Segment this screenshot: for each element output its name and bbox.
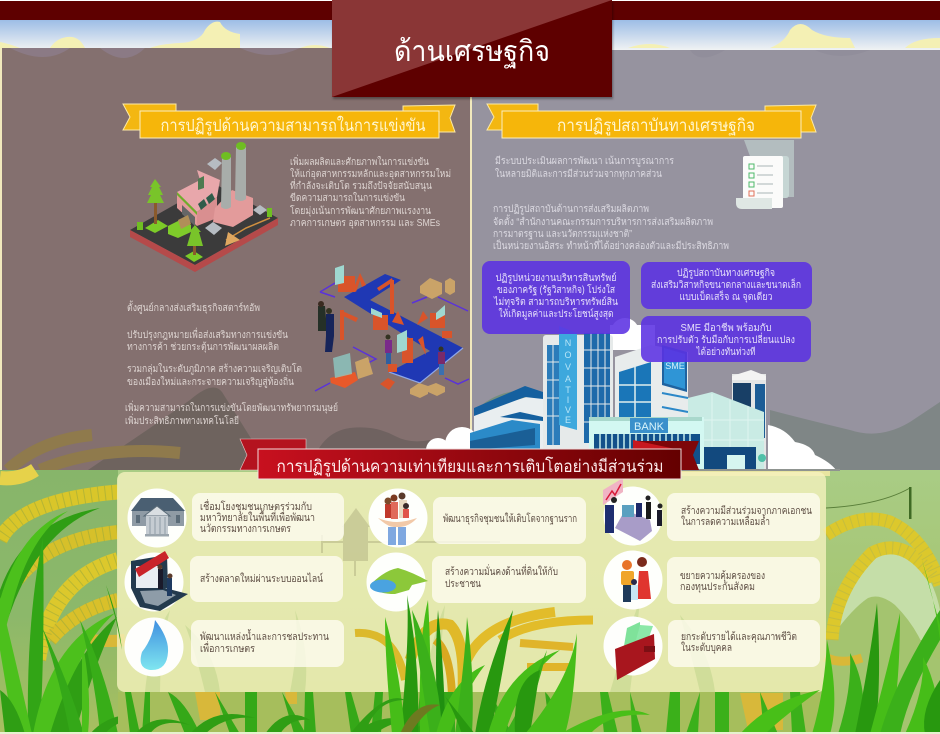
panel: asset management box: ปฏิรูปหน่วยงานบริหารสินทรัพย์ — [496, 272, 616, 284]
purple arrows — [315, 283, 469, 391]
text block: competitiveness intro: ขีดความสามารถในการแข่งขัน — [290, 192, 405, 204]
building: SME: SME — [665, 361, 685, 371]
low green hill — [474, 391, 540, 440]
right green mountain — [826, 597, 940, 734]
tree centre — [185, 225, 203, 262]
text: card 8 — [681, 630, 797, 654]
text: card 5 — [445, 564, 558, 590]
mint panels — [335, 265, 445, 353]
icon: family — [621, 557, 651, 602]
city: buildings — [470, 326, 766, 470]
text: card 5: ประชาชน — [445, 578, 481, 590]
bottom strip — [118, 692, 820, 734]
right block — [213, 190, 253, 227]
background: sky — [0, 20, 940, 52]
mountains right — [770, 402, 940, 470]
text block: productivity reform: เป็นหน่วยงานอิสระ ทำหน้าที่ได้อย่างคล่องตัวและมีประสิทธิภาพ — [493, 238, 729, 252]
panel: right background — [472, 50, 940, 472]
panel: economic institutions box — [641, 262, 812, 309]
building: tower with banner — [543, 326, 613, 470]
text: card 7 — [680, 570, 765, 593]
panel: left background — [0, 48, 472, 472]
icon: green land with pond — [370, 568, 428, 594]
title banner: ด้านเศรษฐกิจ — [394, 36, 550, 69]
building: SME — [615, 345, 688, 470]
text block: institutions evaluation: ในหลายมิติและการมีส่วนร่วมจากทุกภาคส่วน — [495, 168, 662, 180]
icon: family in hands — [378, 492, 417, 545]
text: card 3: เพื่อการเกษตร — [200, 641, 255, 655]
string lights pole — [826, 487, 912, 519]
building: tower with banner: N — [565, 338, 571, 348]
text block: institutions evaluation — [495, 155, 675, 180]
building: bank — [589, 417, 704, 470]
panel: SME box — [641, 316, 811, 362]
text block: competitiveness measures: ทางการค้า ช่วยกระตุ้นการพัฒนาผลผลิต — [127, 341, 279, 353]
ground — [0, 470, 940, 734]
text: card 3 — [200, 629, 329, 655]
building: tower with banner: T — [565, 385, 571, 395]
panel: SME box: การปรับตัว รับมือกับการเปลี่ยนแปลง — [657, 332, 795, 346]
text: card 1: เชื่อมโยงชุมชนเกษตรร่วมกับ — [200, 499, 312, 513]
building: tower with banner: I — [567, 395, 569, 405]
building: tower with banner: E — [565, 415, 571, 425]
text: card 8: ยกระดับรายได้และคุณภาพชีวิต — [681, 630, 797, 643]
boxes — [410, 278, 455, 398]
panel: asset management box: ของภาครัฐ (รัฐวิสาหกิจ) โปร่งใส — [497, 283, 615, 296]
operators — [318, 301, 445, 375]
icon circles — [124, 486, 662, 676]
panel: cream inequality panel — [117, 472, 826, 692]
panel: economic institutions box: ส่งเสริมวิสาหกิจขนาดกลางและขนาดเล็ก — [651, 277, 801, 291]
text block: competitiveness intro: โดยมุ่งเน้นการพัฒนาศักยภาพแรงงาน — [290, 204, 431, 217]
title banner — [332, 0, 612, 97]
bottom edge — [0, 732, 940, 734]
right light sky patch — [835, 547, 940, 640]
tree left — [147, 179, 164, 224]
text block: productivity reform: จัดตั้ง “สำนักงานคณะกรรมการบริหารการส่งเสริมผลิตภาพ — [493, 214, 713, 228]
panel: SME box: SME มีอาชีพ พร้อมกับ — [680, 322, 772, 334]
top band — [0, 1, 940, 20]
building: right tower — [732, 370, 766, 470]
text: card 6: สร้างความมีส่วนร่วมจากภาคเอกชน — [681, 504, 812, 517]
robot arms — [338, 273, 452, 390]
building: tower with banner: A — [565, 374, 571, 384]
text block: competitiveness intro: เพิ่มผลผลิตและศักยภาพในการแข่งขัน — [290, 154, 429, 168]
mountains left — [88, 388, 430, 470]
clouds behind city — [424, 318, 836, 470]
panel: economic institutions box: ปฏิรูปสถาบันทางเศรษฐกิจ — [677, 268, 775, 279]
text block: competitiveness measures: เพิ่มความสามารถในการแข่งขันโดยพัฒนาทรัพยากรมนุษย์ — [125, 400, 338, 414]
ribbon: institutions — [487, 104, 816, 138]
text block: competitiveness intro: ให้แก่อุตสาหกรรมหลักและอุตสาหกรรมใหม่ — [290, 168, 451, 180]
panel: asset management box: ให้เกิดมูลค่าและประโยชน์สูงสุด — [498, 307, 614, 320]
icon: government building — [131, 498, 185, 536]
text block: competitiveness intro — [290, 154, 451, 229]
text: card 6 — [681, 504, 812, 528]
ribbon: competitiveness — [123, 104, 455, 138]
building: glass green — [688, 392, 766, 470]
right grass — [812, 640, 834, 734]
panel: asset management box: ไม่ทุจริต สามารถบริหารทรัพย์สิน — [493, 296, 618, 308]
centre grass clump — [400, 595, 418, 734]
text: card 3: พัฒนาแหล่งน้ำและการชลประทาน — [200, 629, 329, 643]
icon: isometric factory — [130, 142, 278, 272]
icon: business meeting — [603, 478, 662, 541]
rice stalks right — [825, 519, 940, 661]
chimneys — [221, 157, 231, 209]
text block: productivity reform: การปฏิรูปสถาบันด้านการส่งเสริมผลิตภาพ — [493, 203, 649, 215]
text block: competitiveness measures: ของเมืองใหม่และกระจายความเจริญสู่ท้องถิ่น — [127, 374, 294, 388]
text block: competitiveness intro: ที่กำลังจะเติบโต รวมถึงปัจจัยสนับสนุน — [290, 178, 432, 192]
icon: water drop — [141, 620, 168, 670]
text: card 2: สร้างตลาดใหม่ผ่านระบบออนไลน์ — [200, 572, 323, 585]
building: tower with banner: V — [565, 405, 571, 415]
building: left low — [470, 386, 543, 450]
building: tower with banner: O — [564, 350, 572, 360]
ribbon: inequality — [240, 439, 699, 479]
ribbon: institutions: การปฏิรูปสถาบันทางเศรษฐกิจ — [557, 116, 755, 136]
text block: competitiveness intro: ภาคการเกษตร อุตสาหกรรม และ SMEs — [290, 218, 440, 229]
text: card 1: นวัตกรรมทางการเกษตร — [200, 523, 291, 535]
ribbon: competitiveness: การปฏิรูปด้านความสามารถในการแข่งขัน — [160, 115, 426, 136]
main hall — [177, 192, 197, 226]
text block: productivity reform — [493, 203, 729, 252]
text: card 1 — [200, 499, 315, 535]
faint background blades — [145, 600, 715, 692]
text block: competitiveness measures: ปรับปรุงกฎหมายเพื่อส่งเสริมทางการแข่งขัน — [127, 327, 288, 341]
text block: productivity reform: การมาตรฐาน และนวัตกรรมแห่งชาติ” — [493, 229, 632, 240]
panel: asset management box — [482, 261, 630, 334]
text: card 4: พัฒนาธุรกิจชุมชนให้เติบโตจากฐานราก — [443, 512, 577, 525]
text: card 7: ขยายความคุ้มครองของ — [680, 570, 765, 582]
text: card 6: ในการลดความเหลื่อมล้ำ — [681, 514, 770, 528]
text block: competitiveness measures: รวมกลุ่มในระดับภูมิภาค สร้างความเจริญเติบโต — [127, 362, 302, 375]
text: card 5: สร้างความมั่นคงด้านที่ดินให้กับ — [445, 564, 558, 578]
scarecrow — [322, 508, 500, 576]
text: card 7: กองทุนประกันสังคม — [680, 581, 755, 593]
text: card 8: ในระดับบุคคล — [681, 641, 732, 654]
truck — [168, 220, 191, 238]
foreground grass — [0, 508, 940, 734]
panel: SME box: ได้อย่างทันท่วงที — [696, 346, 756, 358]
building: bank: BANK — [634, 421, 665, 433]
text: card 1: มหาวิทยาลัยในพื้นที่เพื่อพัฒนา — [200, 510, 315, 524]
text block: institutions evaluation: มีระบบประเมินผลการพัฒนา เน้นการบูรณาการ — [495, 155, 675, 167]
cards — [190, 493, 820, 667]
text block: competitiveness measures: เพิ่มประสิทธิภาพทางเทคโนโลยี — [125, 413, 239, 427]
building: tower with banner: V — [565, 362, 571, 372]
rice stalks left — [0, 470, 125, 660]
text block: competitiveness measures: ตั้งศูนย์กลางส่งเสริมธุรกิจสตาร์ทอัพ — [127, 300, 260, 314]
forklift — [330, 353, 373, 388]
ribbon: inequality: การปฏิรูปด้านความเท่าเทียมและการเติบโตอย่างมีส่วนร่วม — [276, 456, 664, 477]
panel: economic institutions box: แบบเบ็ดเสร็จ ณ จุดเดียว — [680, 289, 772, 303]
tree left base — [145, 220, 168, 233]
rice behind centre grass — [355, 612, 593, 695]
rice over left panel — [8, 435, 180, 470]
icon: checklist scroll — [736, 140, 794, 209]
icon: wallet with banknotes — [615, 622, 655, 680]
icon: online shop laptop — [131, 551, 188, 611]
text block: competitiveness measures — [125, 300, 338, 427]
icon: conveyor robot line — [315, 265, 469, 398]
